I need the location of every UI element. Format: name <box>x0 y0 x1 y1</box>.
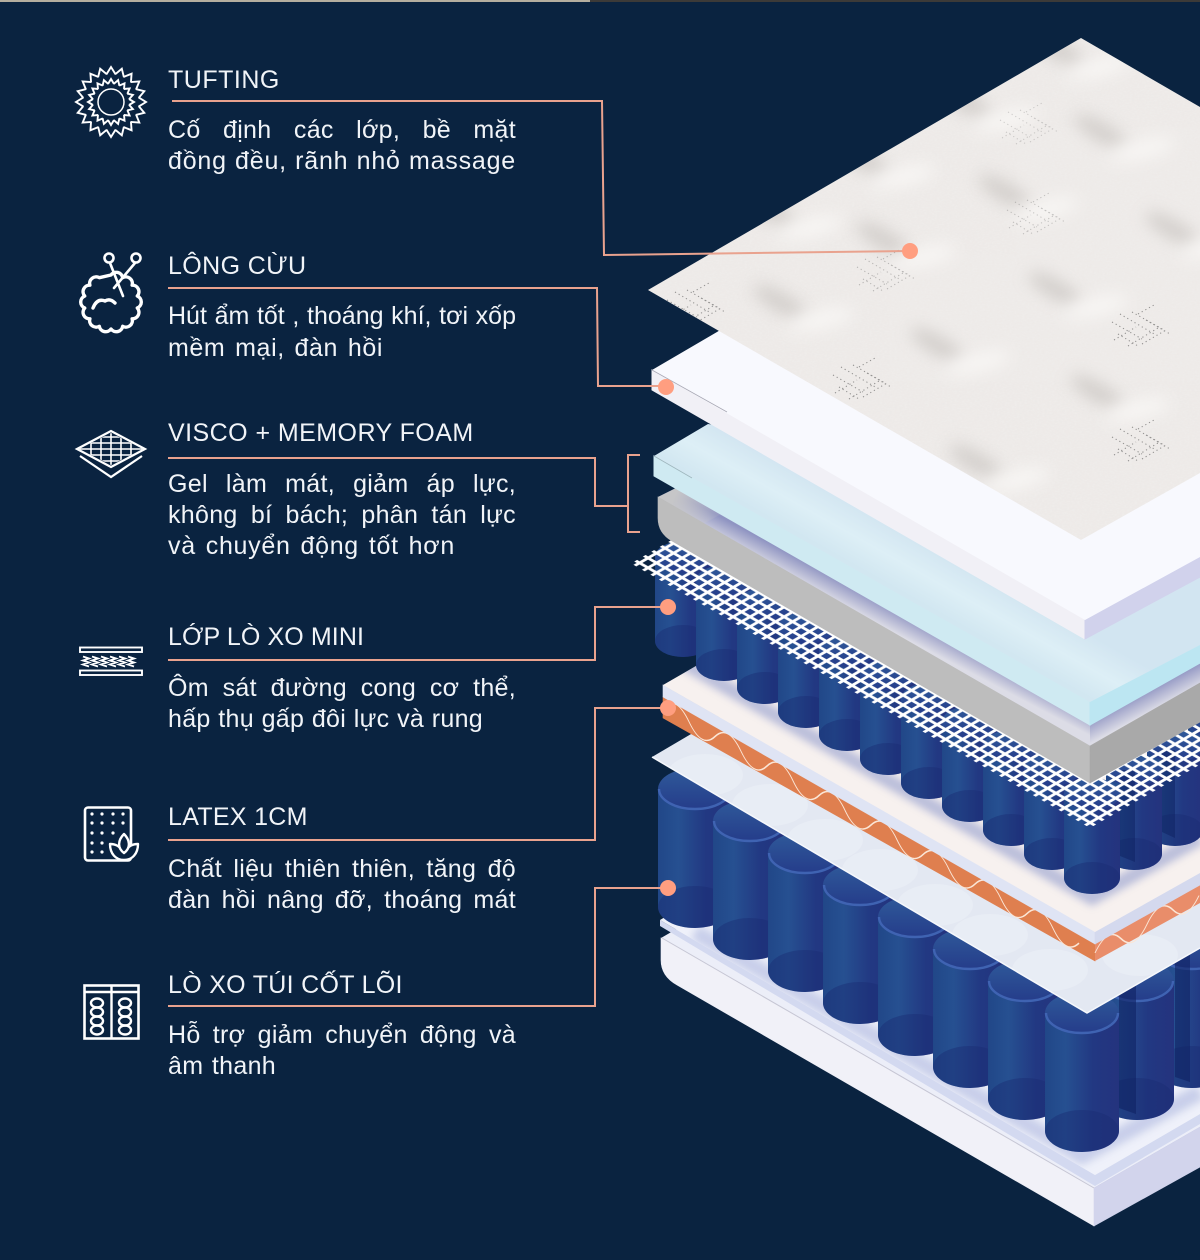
text: mini spring: Ôm sát đường cong cơ thể, <box>168 674 516 702</box>
wave line <box>663 697 1079 953</box>
icon: tufting burst <box>76 67 146 137</box>
text: foam: Gel làm mát, giảm áp lực, <box>168 470 516 498</box>
heading: pocket spring: LÒ XO TÚI CỐT LÕI <box>168 971 403 999</box>
gray front-left face <box>658 497 1090 783</box>
latex layer <box>663 606 1200 963</box>
text: mini spring: hấp thụ gấp đôi lực và rung <box>168 705 483 733</box>
text: foam: không bí bách; phân tán lực <box>168 501 516 529</box>
text: latex: đàn hồi nâng đỡ, thoáng mát <box>168 886 516 914</box>
text: mini spring <box>168 674 516 733</box>
blue gel foam layer <box>654 424 1200 725</box>
text: tufting: đồng đều, rãnh nhỏ massage <box>168 147 516 175</box>
connector: foam bracket <box>168 455 640 532</box>
text: foam: và chuyển động tốt hơn <box>168 532 455 560</box>
gray right face <box>1090 683 1200 783</box>
text: tufting <box>168 116 516 175</box>
heading: tufting: TUFTING <box>168 66 280 94</box>
quilted sheet <box>652 717 1200 1013</box>
pocket springs <box>658 768 1200 1152</box>
text: latex <box>168 855 516 914</box>
latex top surface <box>663 606 1200 932</box>
mini springs <box>655 541 1200 894</box>
text: pocket spring <box>168 1021 516 1080</box>
text: pocket spring: âm thanh <box>168 1052 276 1080</box>
text: foam <box>168 470 516 560</box>
icon: wool ball <box>81 254 141 332</box>
base front-left face <box>661 938 1094 1226</box>
heading: mini spring: LỚP LÒ XO MINI <box>168 623 364 651</box>
text: wool: mềm mại, đàn hồi <box>168 334 383 362</box>
inner surface <box>660 900 1200 1175</box>
base top surface <box>661 900 1200 1188</box>
icon: foam layers <box>75 430 147 477</box>
latex edge <box>663 685 1095 944</box>
text: latex: Chất liệu thiên thiên, tăng độ <box>168 855 516 883</box>
icon: pocket spring <box>84 985 138 1038</box>
tufted top layer <box>640 27 1200 550</box>
connector: mini spring <box>168 599 676 660</box>
icon: mini spring <box>80 648 142 675</box>
base mattress layer <box>660 900 1200 1226</box>
text: wool: Hút ẩm tốt , thoáng khí, tơi xốp <box>168 302 516 330</box>
connector: tufting <box>172 101 918 259</box>
connector: pocket spring <box>168 880 676 1006</box>
text: pocket spring: Hỗ trợ giảm chuyển động và <box>168 1021 516 1049</box>
connector: wool <box>168 288 674 395</box>
gray foam layer <box>658 486 1200 783</box>
text: wool <box>168 302 516 362</box>
mesh net layer <box>631 512 1200 828</box>
connector: latex <box>168 700 676 840</box>
orange latex band <box>663 697 1095 961</box>
white foam layer <box>652 100 1200 639</box>
inner surface edge <box>660 920 1200 1186</box>
heading: wool: LÔNG CỪU <box>168 252 306 280</box>
text: tufting: Cố định các lớp, bề mặt <box>168 116 516 144</box>
icon: latex sheet <box>85 808 138 860</box>
base right face <box>1094 1127 1200 1226</box>
top edge strip <box>0 0 1200 2</box>
heading: latex: LATEX 1CM <box>168 803 308 831</box>
heading: foam: VISCO + MEMORY FOAM <box>168 419 474 447</box>
